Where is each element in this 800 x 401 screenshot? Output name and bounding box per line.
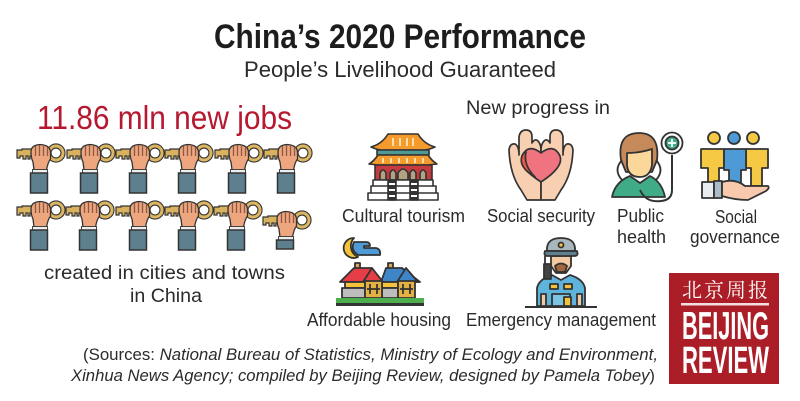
- sources note: Xinhua News Agency; compiled by Beijing Review, designed by Pamela Tobey ): [70, 367, 655, 385]
- jobs caption: in China: [130, 285, 202, 307]
- icon: emergency worker: [525, 238, 597, 307]
- subtitle: People’s Livelihood Guaranteed: [244, 57, 556, 82]
- jobs caption: [44, 262, 285, 307]
- label: emergency management: Emergency management: [466, 310, 656, 330]
- sources note: [70, 346, 658, 385]
- label: social security: Social security: [487, 206, 595, 226]
- label: public health: Public: [617, 206, 664, 226]
- pictogram: hands holding keys: [17, 144, 310, 250]
- logo: Beijing Review: [669, 273, 779, 384]
- icon: people in hand: [701, 132, 769, 200]
- jobs caption: created in cities and towns: [44, 262, 285, 284]
- label: social governance: Social: [715, 207, 757, 227]
- logo: Beijing Review: 北京周报: [682, 274, 768, 303]
- icon: doctor with stethoscope: [612, 132, 682, 201]
- label: social governance: [690, 207, 780, 247]
- heading: new progress: New progress in: [466, 97, 610, 119]
- headline: new jobs: 11.86 mln new jobs: [37, 99, 292, 136]
- title: China’s 2020 Performance: [214, 18, 586, 56]
- sources note: (Sources: National Bureau of Statistics, Ministry of Ecology and Environment,: [83, 346, 658, 364]
- icon: temple: [368, 134, 438, 200]
- label: cultural tourism: Cultural tourism: [342, 206, 465, 226]
- label: public health: [617, 206, 666, 247]
- icon: houses: [336, 238, 424, 306]
- label: public health: health: [617, 227, 666, 247]
- label: affordable housing: Affordable housing: [307, 310, 451, 330]
- label: social governance: governance: [690, 227, 780, 247]
- icon: hands holding heart: [509, 130, 573, 200]
